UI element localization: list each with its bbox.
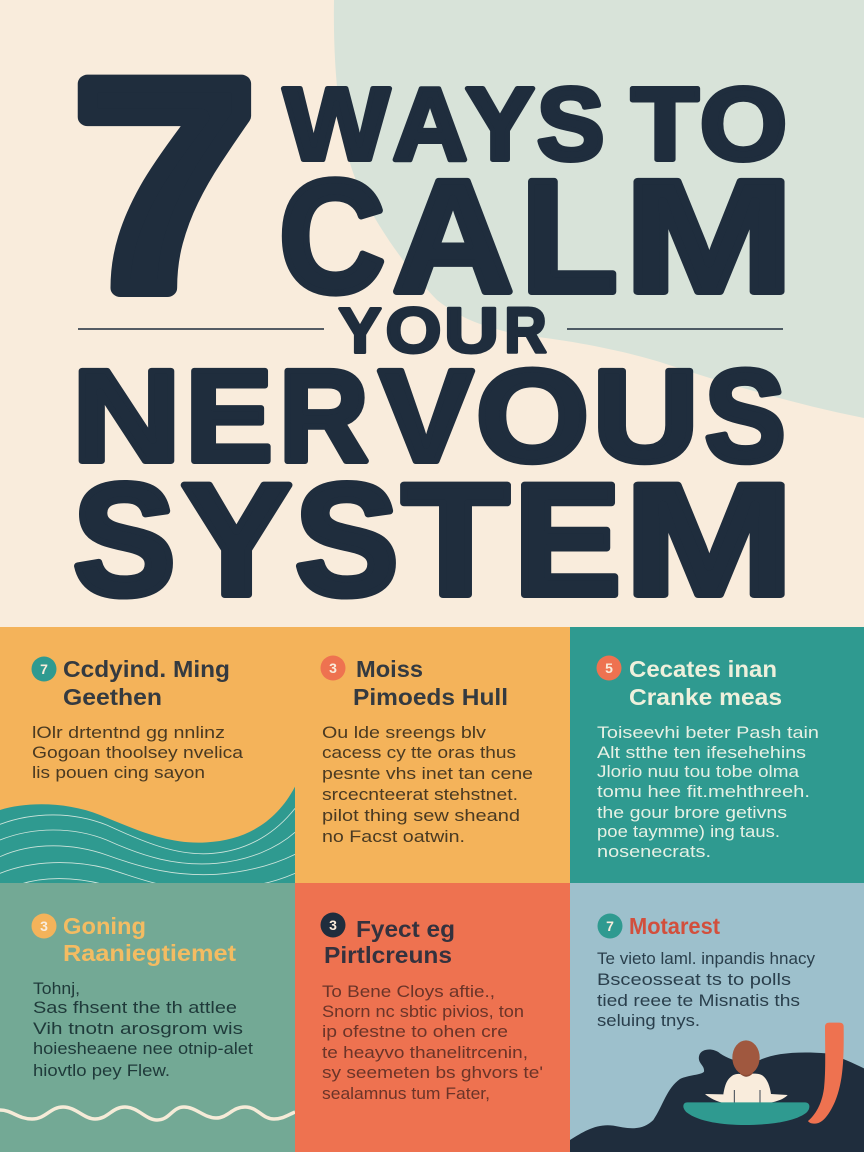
panel heading bbox=[63, 913, 236, 966]
number badge bbox=[596, 656, 622, 680]
icon: person bbox=[705, 1040, 788, 1103]
background blob bbox=[334, 0, 864, 418]
panel body text: lOlr drtentnd gg nnlinz bbox=[32, 724, 225, 742]
panel body text: Gogoan thoolsey nvelica bbox=[32, 744, 244, 762]
panel heading bbox=[353, 656, 508, 710]
panel heading: Motarest bbox=[629, 913, 720, 939]
panel heading: Moiss bbox=[356, 656, 423, 682]
panel body text: cacess cy tte oras thus bbox=[322, 744, 516, 762]
panel body text: sy seemeten bs ghvors te' bbox=[322, 1064, 543, 1082]
icon: coral bar bbox=[808, 1023, 844, 1124]
panel heading: Pirtlcreuns bbox=[324, 942, 452, 968]
panel body text: Snorn nc sbtic pivios, ton bbox=[322, 1003, 524, 1021]
title line: SYSTEM: S bbox=[295, 450, 399, 628]
number badge: 3 bbox=[40, 918, 48, 934]
panel heading bbox=[629, 656, 782, 710]
panel body text: nosenecrats. bbox=[597, 843, 711, 861]
number badge: 7 bbox=[40, 661, 48, 677]
panel heading bbox=[63, 656, 230, 710]
panel heading: Fyect eg bbox=[356, 916, 455, 942]
panel body text bbox=[597, 724, 819, 861]
panel body text: the gour brore getivns bbox=[597, 804, 787, 822]
title line: SYSTEM: Y bbox=[182, 450, 292, 628]
panel body text: Toiseevhi beter Pash tain bbox=[597, 724, 819, 742]
title line: WAYS TO: Y bbox=[466, 66, 534, 182]
panel body text: seluing tnys. bbox=[597, 1012, 700, 1030]
title line: WAYS TO: W bbox=[284, 66, 390, 182]
panel body text: tied reee te Misnatis ths bbox=[597, 992, 800, 1010]
title line: CALM: A bbox=[392, 146, 514, 326]
title line: NERVOUS: R bbox=[279, 342, 369, 489]
panel body text: no Facst oatwin. bbox=[322, 828, 465, 846]
number badge: 5 bbox=[605, 660, 613, 676]
panel body text: Sas fhsent the th attlee bbox=[33, 999, 237, 1017]
panel body text: sealamnus tum Fater, bbox=[322, 1085, 490, 1103]
number badge: 7 bbox=[606, 918, 614, 934]
panel body text: lis pouen cing sayon bbox=[32, 764, 205, 782]
panel body text bbox=[597, 950, 816, 1030]
icon: wave with lines bbox=[0, 787, 295, 884]
number badge: 3 bbox=[329, 660, 337, 676]
panel body text: Bsceosseat ts to polls bbox=[597, 971, 791, 989]
panel: blue bbox=[570, 883, 864, 1152]
panel heading: Geethen bbox=[63, 684, 162, 710]
number badge: 3 bbox=[329, 917, 337, 933]
panel: sage bbox=[0, 883, 295, 1152]
title line: WAYS TO: A bbox=[392, 66, 468, 182]
panel body text: Jlorio nuu tou tobe olma bbox=[597, 763, 800, 781]
title line: CALM: L bbox=[521, 146, 618, 326]
panel body text: hiovtlo pey Flew. bbox=[33, 1062, 170, 1080]
title line: SYSTEM: T bbox=[402, 450, 509, 628]
panel body text bbox=[33, 980, 253, 1080]
icon: wavy line bbox=[0, 1107, 295, 1120]
number badge bbox=[320, 912, 346, 938]
panel: teal bbox=[570, 627, 864, 883]
title line: NERVOUS: S bbox=[705, 342, 786, 489]
panel body text: pesnte vhs inet tan cene bbox=[322, 765, 533, 783]
panel: coral bbox=[295, 883, 570, 1152]
panel heading: Pimoeds Hull bbox=[353, 684, 508, 710]
title numeral 7: 7 bbox=[74, 19, 256, 351]
title line: NERVOUS: U bbox=[593, 342, 699, 489]
title line: CALM: C bbox=[279, 146, 385, 326]
icon: teal boat bbox=[683, 1102, 809, 1125]
title line: YOUR: R bbox=[504, 294, 547, 366]
panel body text: te heayvo thanelitrcenin, bbox=[322, 1044, 528, 1062]
number badge bbox=[320, 656, 346, 680]
title line: YOUR: Y bbox=[338, 294, 382, 366]
panel body text: poe taymme) ing taus. bbox=[597, 823, 780, 841]
title bbox=[72, 19, 794, 628]
title line: CALM: M bbox=[624, 146, 794, 326]
panel body text: Alt stthe ten ifesehehins bbox=[597, 744, 806, 762]
title line: WAYS TO: T bbox=[631, 66, 699, 182]
title line: YOUR: U bbox=[444, 294, 499, 366]
panel body text: hoiesheaene nee otnip-alet bbox=[33, 1040, 253, 1058]
title line: NERVOUS: E bbox=[185, 342, 273, 489]
panel body text: To Bene Cloys aftie., bbox=[322, 983, 495, 1001]
title line: SYSTEM: M bbox=[624, 450, 794, 628]
panel body text: srcecnteerat stehstnet. bbox=[322, 786, 518, 804]
panel heading: Cranke meas bbox=[629, 684, 782, 710]
title line: WAYS TO: S bbox=[537, 66, 604, 182]
title line: NERVOUS: N bbox=[72, 342, 181, 489]
illustration: person meditating on a boat bbox=[570, 1023, 864, 1152]
panel body text: ip ofestne to ohen cre bbox=[322, 1023, 508, 1041]
title line: NERVOUS: O bbox=[476, 342, 589, 489]
title line: SYSTEM: E bbox=[514, 450, 621, 628]
number badge bbox=[32, 914, 56, 938]
title line: NERVOUS: V bbox=[379, 342, 473, 489]
panel body text: Tohnj, bbox=[33, 980, 80, 998]
panel: orange 2 bbox=[295, 627, 570, 883]
number badge bbox=[32, 656, 56, 682]
panel body text: Te vieto laml. inpandis hnacy bbox=[597, 950, 816, 968]
panel body text: pilot thing sew sheand bbox=[322, 807, 520, 825]
panel body text: Ou lde sreengs blv bbox=[322, 724, 487, 742]
panel body text: tomu hee fit.mehthreeh. bbox=[597, 783, 810, 801]
panel heading: Raaniegtiemet bbox=[63, 940, 236, 966]
panel body text bbox=[322, 983, 543, 1103]
panel: orange 1 bbox=[0, 627, 295, 884]
title line: SYSTEM: S bbox=[73, 450, 176, 628]
number badge bbox=[598, 914, 622, 938]
title line: YOUR: O bbox=[386, 294, 442, 366]
panel heading: Ccdyind. Ming bbox=[63, 656, 230, 682]
panel body text: Vih tnotn arosgrom wis bbox=[33, 1020, 243, 1038]
panel heading: Goning bbox=[63, 913, 146, 939]
panel body text bbox=[32, 724, 244, 782]
panel body text bbox=[322, 724, 533, 846]
panel heading bbox=[324, 916, 455, 968]
title line: WAYS TO: O bbox=[700, 66, 787, 182]
panel heading: Cecates inan bbox=[629, 656, 777, 682]
